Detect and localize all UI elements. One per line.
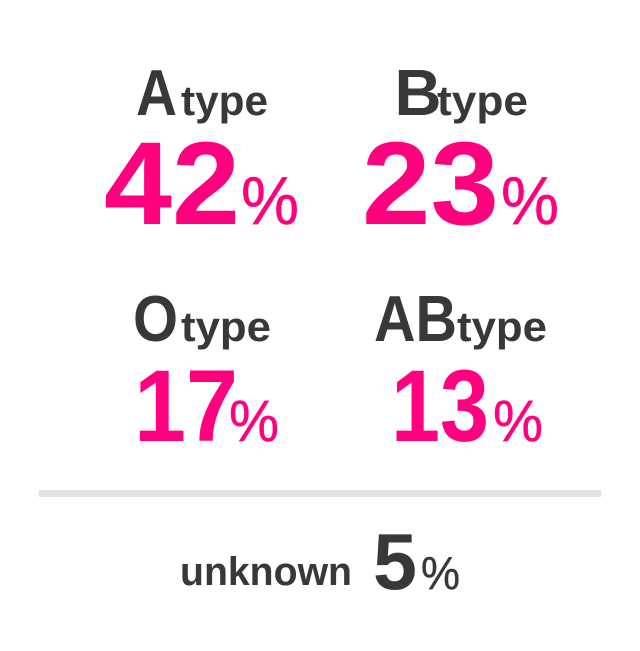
percent sign: A type: % xyxy=(241,163,299,239)
heading: A type: type xyxy=(181,77,268,124)
value: 5%: 5 xyxy=(373,517,417,606)
value: 17%: 17 xyxy=(134,349,238,463)
divider xyxy=(39,490,601,497)
heading: B type: B xyxy=(394,56,442,129)
heading: AB type: AB xyxy=(374,282,457,355)
value: 13%: 13 xyxy=(391,349,489,463)
value: 23%: 23 xyxy=(362,118,499,250)
B type block xyxy=(362,56,559,250)
heading: O type xyxy=(133,282,271,355)
heading: AB type: type xyxy=(457,303,547,350)
A type block xyxy=(104,56,299,250)
unknown block xyxy=(180,517,460,606)
heading: A type: A xyxy=(136,56,177,129)
percent sign: O type: % xyxy=(229,389,279,454)
heading: B type xyxy=(394,56,528,129)
heading: O type: O xyxy=(133,282,178,355)
value: 42%: 42 xyxy=(104,118,240,250)
heading: AB type xyxy=(374,282,547,355)
label: unknown: unknown xyxy=(180,550,352,594)
heading: O type: type xyxy=(181,303,271,350)
heading: B type: type xyxy=(437,77,528,124)
AB type block xyxy=(374,282,547,463)
percent sign: AB type: % xyxy=(493,389,543,454)
heading: A type xyxy=(136,56,268,129)
percent sign: B type: % xyxy=(501,163,559,239)
percent sign: unknown: % xyxy=(421,547,460,599)
O type block xyxy=(133,282,279,463)
